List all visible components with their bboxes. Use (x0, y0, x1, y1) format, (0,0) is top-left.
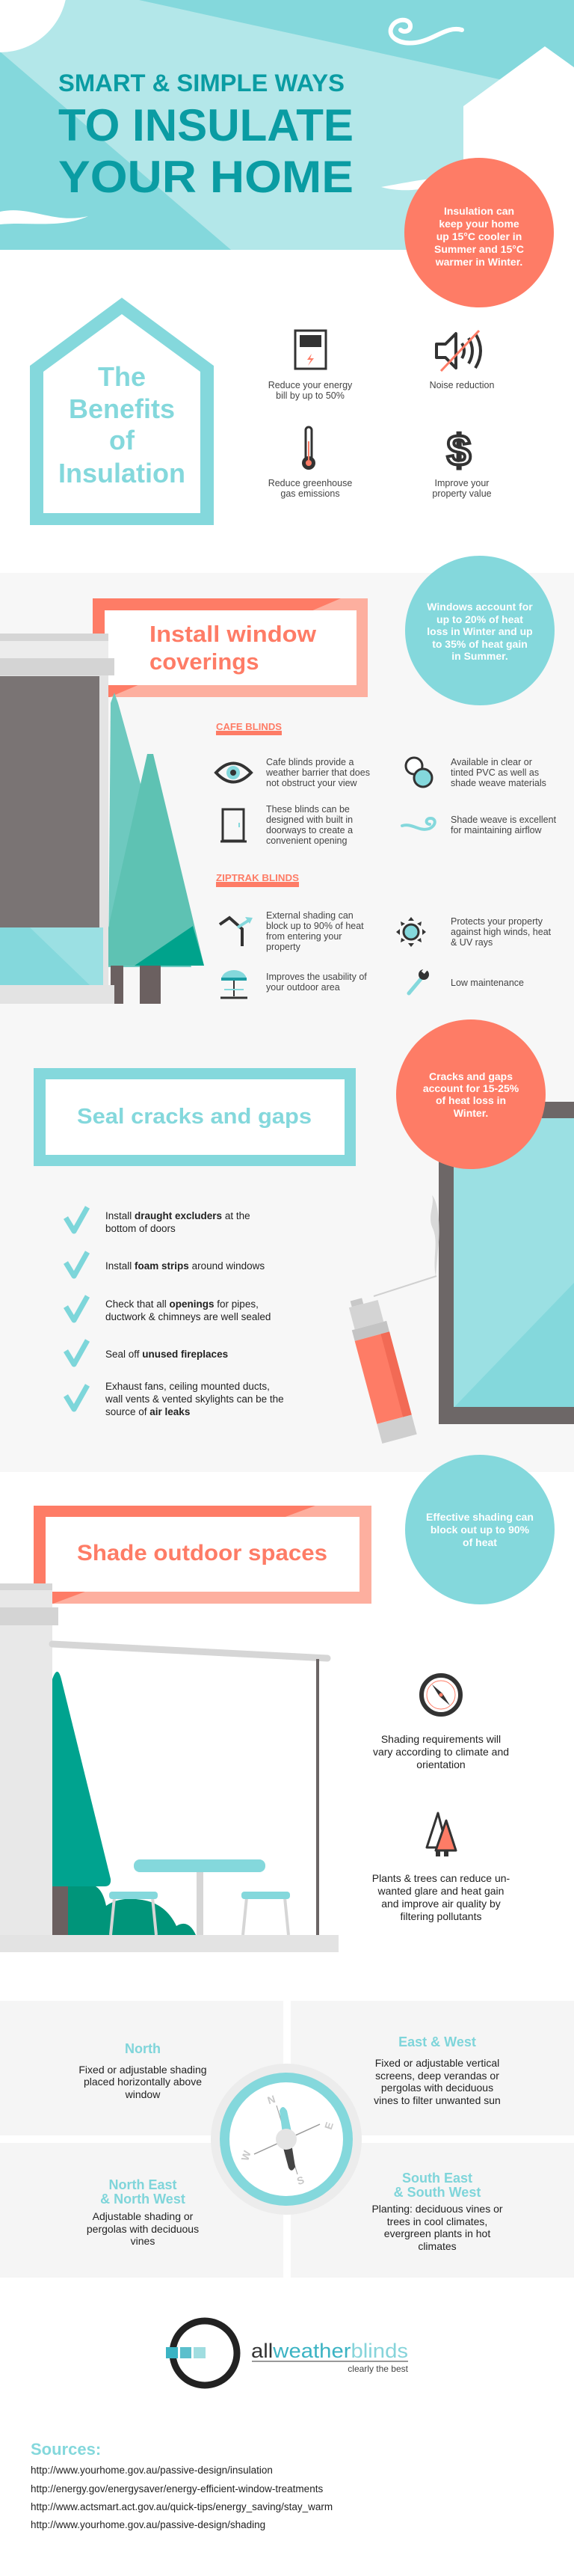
panel: east and west (291, 2001, 574, 2135)
sources: Sources: (31, 2440, 101, 2459)
sources: http://www.yourhome.gov.au/passive-design/shading (31, 2519, 265, 2530)
panel: east and west: East & West (398, 2034, 476, 2049)
item: external shading: External shading can (266, 910, 354, 921)
panel: south east and south west: & South West (394, 2185, 481, 2200)
item: eye / view: weather barrier that does (265, 767, 370, 778)
illustration: patio with awning (0, 1583, 339, 1952)
callout: windows stat: in Summer. (451, 650, 508, 662)
heading box: shade outdoor spaces (34, 1506, 371, 1604)
item: doorways (220, 804, 353, 846)
callout: cracks stat: of heat loss in (436, 1094, 506, 1106)
tip: plants and trees: wanted glare and heat gain (377, 1885, 504, 1897)
sources: http://energy.gov/energysaver/energy-efficient-window-treatments (31, 2483, 323, 2494)
heading box: install window coverings: coverings (149, 648, 259, 675)
panel: north east and north west: vines (131, 2235, 155, 2247)
heading box: shade outdoor spaces: Shade outdoor spaces (77, 1541, 327, 1565)
callout: windows stat (405, 556, 555, 705)
panel: benefits house heading: Benefits (69, 393, 175, 424)
title: TO INSULATE (58, 100, 354, 150)
checklist: Install draught excluders at the (105, 1210, 250, 1221)
item: doorways: designed with built in (266, 815, 353, 825)
checklist: source of air leaks (105, 1406, 190, 1417)
callout: shading stat: block out up to 90% (430, 1524, 530, 1536)
benefit: property value: $ (447, 426, 471, 475)
item: doorways: These blinds can be (266, 804, 350, 815)
panel: south east and south west: trees in cool climates, (387, 2215, 487, 2227)
benefit: greenhouse gas: gas emissions (280, 488, 340, 499)
panel: east and west: vines to filter unwanted sun (374, 2094, 501, 2106)
title (58, 70, 354, 202)
panel: south east and south west: South East (402, 2171, 472, 2186)
panel: east and west: Fixed or adjustable vertical (375, 2057, 499, 2069)
callout: windows stat: up to 20% of heat (436, 613, 523, 625)
item: weather protection: & UV rays (451, 937, 493, 948)
callout: windows stat: to 35% of heat gain (432, 638, 528, 650)
benefit: energy bill: bill by up to 50% (276, 390, 345, 401)
section background: window coverings and seal (0, 573, 574, 1472)
benefit: noise reduction (430, 331, 494, 390)
tip: plants and trees: Plants & trees can reduce un- (372, 1872, 510, 1884)
item: external shading (220, 910, 364, 952)
illustration: building with window and trees (0, 634, 204, 1004)
item: PVC materials: shade weave materials (451, 778, 546, 788)
checklist (66, 1207, 284, 1417)
panel: south east and south west: climates (418, 2240, 457, 2252)
checklist: Seal off unused fireplaces (105, 1349, 228, 1360)
panel: south east and south west (291, 2143, 574, 2278)
header background (0, 0, 574, 250)
benefit: property value (432, 426, 492, 499)
callout: cracks stat: Cracks and gaps (429, 1070, 513, 1082)
panel: north east and north west: pergolas with deciduous (87, 2223, 199, 2235)
item: eye / view: not obstruct your view (266, 778, 358, 788)
callout: windows stat: Windows account for (427, 601, 533, 613)
item: airflow (402, 815, 557, 835)
icon: compass: N (266, 2093, 277, 2106)
callout: cracks stat: account for 15-25% (423, 1082, 519, 1094)
panel: benefits house heading: of (109, 425, 135, 456)
panel: east and west: screens, deep verandas or (375, 2070, 499, 2082)
heading box: install window coverings: Install window (149, 621, 317, 647)
benefit: energy bill (268, 331, 353, 401)
item: PVC materials: Available in clear or (451, 757, 532, 767)
icon: compass: E (322, 2120, 336, 2131)
item: low maintenance (409, 967, 524, 993)
checklist: Install foam strips around windows (105, 1260, 265, 1272)
illustration: window frame (439, 1102, 574, 1424)
item: outdoor usability: your outdoor area (266, 982, 340, 993)
panel: north east and north west: North East (108, 2177, 177, 2192)
illustration: spray can (345, 1195, 439, 1444)
benefit: property value: Improve your (435, 478, 489, 488)
callout: insulation stat: warmer in Winter. (435, 256, 522, 268)
sources: http://www.actsmart.act.gov.au/quick-tips/energy_saving/stay_warm (31, 2501, 333, 2512)
benefit: greenhouse gas (268, 427, 352, 499)
tip: shading requirements: Shading requirements will (381, 1733, 501, 1745)
checklist: ductwork & chimneys are well sealed (105, 1311, 271, 1322)
item: PVC materials (406, 757, 546, 788)
callout: cracks stat: Winter. (454, 1107, 488, 1119)
item: outdoor usability (220, 970, 367, 998)
panel: north: window (125, 2088, 161, 2100)
logo: allweatherblinds: clearly the best (348, 2364, 409, 2374)
panel: south east and south west: Planting: deciduous vines or (371, 2203, 503, 2215)
icon: compass: S (295, 2174, 306, 2187)
item: PVC materials: tinted PVC as well as (451, 767, 539, 778)
panel: north (0, 2001, 283, 2135)
logo: allweatherblinds: allweather blinds (251, 2340, 408, 2362)
panel: north: placed horizontally above (84, 2076, 202, 2088)
callout: shading stat (405, 1455, 555, 1604)
benefit: noise reduction: Noise reduction (430, 380, 494, 390)
item: weather protection: against high winds, heat (451, 927, 552, 937)
item: external shading: property (266, 942, 301, 952)
callout: insulation stat: keep your home (439, 218, 519, 230)
panel: benefits house heading: The (98, 361, 146, 392)
checklist: Check that all openings for pipes, (105, 1298, 259, 1310)
item: low maintenance: Low maintenance (451, 978, 524, 988)
sources: http://www.yourhome.gov.au/passive-design/insulation (31, 2465, 273, 2476)
panel: north: North (125, 2041, 161, 2056)
benefit: property value: property value (432, 488, 492, 499)
title: YOUR HOME (58, 152, 354, 202)
callout: windows stat: loss in Winter and up (427, 625, 533, 637)
panel: benefits house heading: Insulation (58, 458, 185, 488)
tip: plants and trees (372, 1813, 510, 1922)
benefit: greenhouse gas: Reduce greenhouse (268, 478, 352, 488)
item: doorways: convenient opening (266, 835, 347, 846)
decorative wind swirls (0, 20, 546, 300)
item: eye / view: Cafe blinds provide a (266, 757, 354, 767)
item: outdoor usability: Improves the usability of (266, 972, 367, 982)
callout: shading stat: of heat (463, 1536, 497, 1548)
panel: south east and south west: evergreen plants in hot (384, 2227, 490, 2239)
callout: insulation stat: Summer and 15°C (434, 243, 524, 255)
callout: insulation stat: Insulation can (444, 205, 514, 217)
checklist: wall vents & vented skylights can be the (105, 1393, 284, 1405)
tip: plants and trees: filtering pollutants (401, 1910, 481, 1922)
heading box: install window coverings (93, 598, 368, 697)
item: doorways: doorways to create a (266, 825, 353, 835)
tip: shading requirements: orientation (416, 1758, 466, 1770)
panel: north east and north west (0, 2143, 283, 2278)
icon: compass (211, 2064, 362, 2215)
callout: insulation stat (404, 158, 554, 307)
tip: shading requirements (373, 1675, 509, 1770)
label: cafe blinds: CAFE BLINDS (216, 721, 282, 732)
panel: north east and north west: & North West (100, 2192, 185, 2207)
tip: plants and trees: and improve air quality by (381, 1898, 501, 1910)
item: external shading: from entering your (266, 931, 342, 942)
callout: cracks stat (396, 1019, 546, 1169)
callout: shading stat: Effective shading can (426, 1511, 534, 1523)
item: weather protection (396, 916, 552, 948)
item: external shading: block up to 90% of heat (266, 921, 364, 931)
panel: east and west: pergolas with deciduous (381, 2082, 493, 2094)
panel: north: Fixed or adjustable shading (78, 2064, 207, 2076)
icon: compass: W (238, 2148, 253, 2162)
logo: allweatherblinds (166, 2321, 409, 2385)
label: ziptrak blinds: ZIPTRAK BLINDS (216, 872, 299, 883)
item: airflow: for maintaining airflow (451, 825, 543, 835)
panel: benefits house heading (30, 298, 214, 525)
item: airflow: Shade weave is excellent (451, 815, 557, 825)
callout: insulation stat: up 15°C cooler in (436, 230, 522, 242)
panel: north east and north west: Adjustable shading or (93, 2210, 194, 2222)
tip: shading requirements: vary according to climate and (373, 1746, 509, 1758)
heading box: seal cracks and gaps: Seal cracks and gaps (77, 1105, 312, 1129)
item: weather protection: Protects your property (451, 916, 543, 927)
benefit: energy bill: Reduce your energy (268, 380, 353, 390)
item: eye / view (216, 757, 370, 788)
heading box: seal cracks and gaps (34, 1068, 356, 1166)
sources (31, 2440, 333, 2530)
title: SMART & SIMPLE WAYS (58, 70, 345, 96)
checklist: bottom of doors (105, 1223, 176, 1234)
checklist: Exhaust fans, ceiling mounted ducts, (105, 1381, 270, 1392)
